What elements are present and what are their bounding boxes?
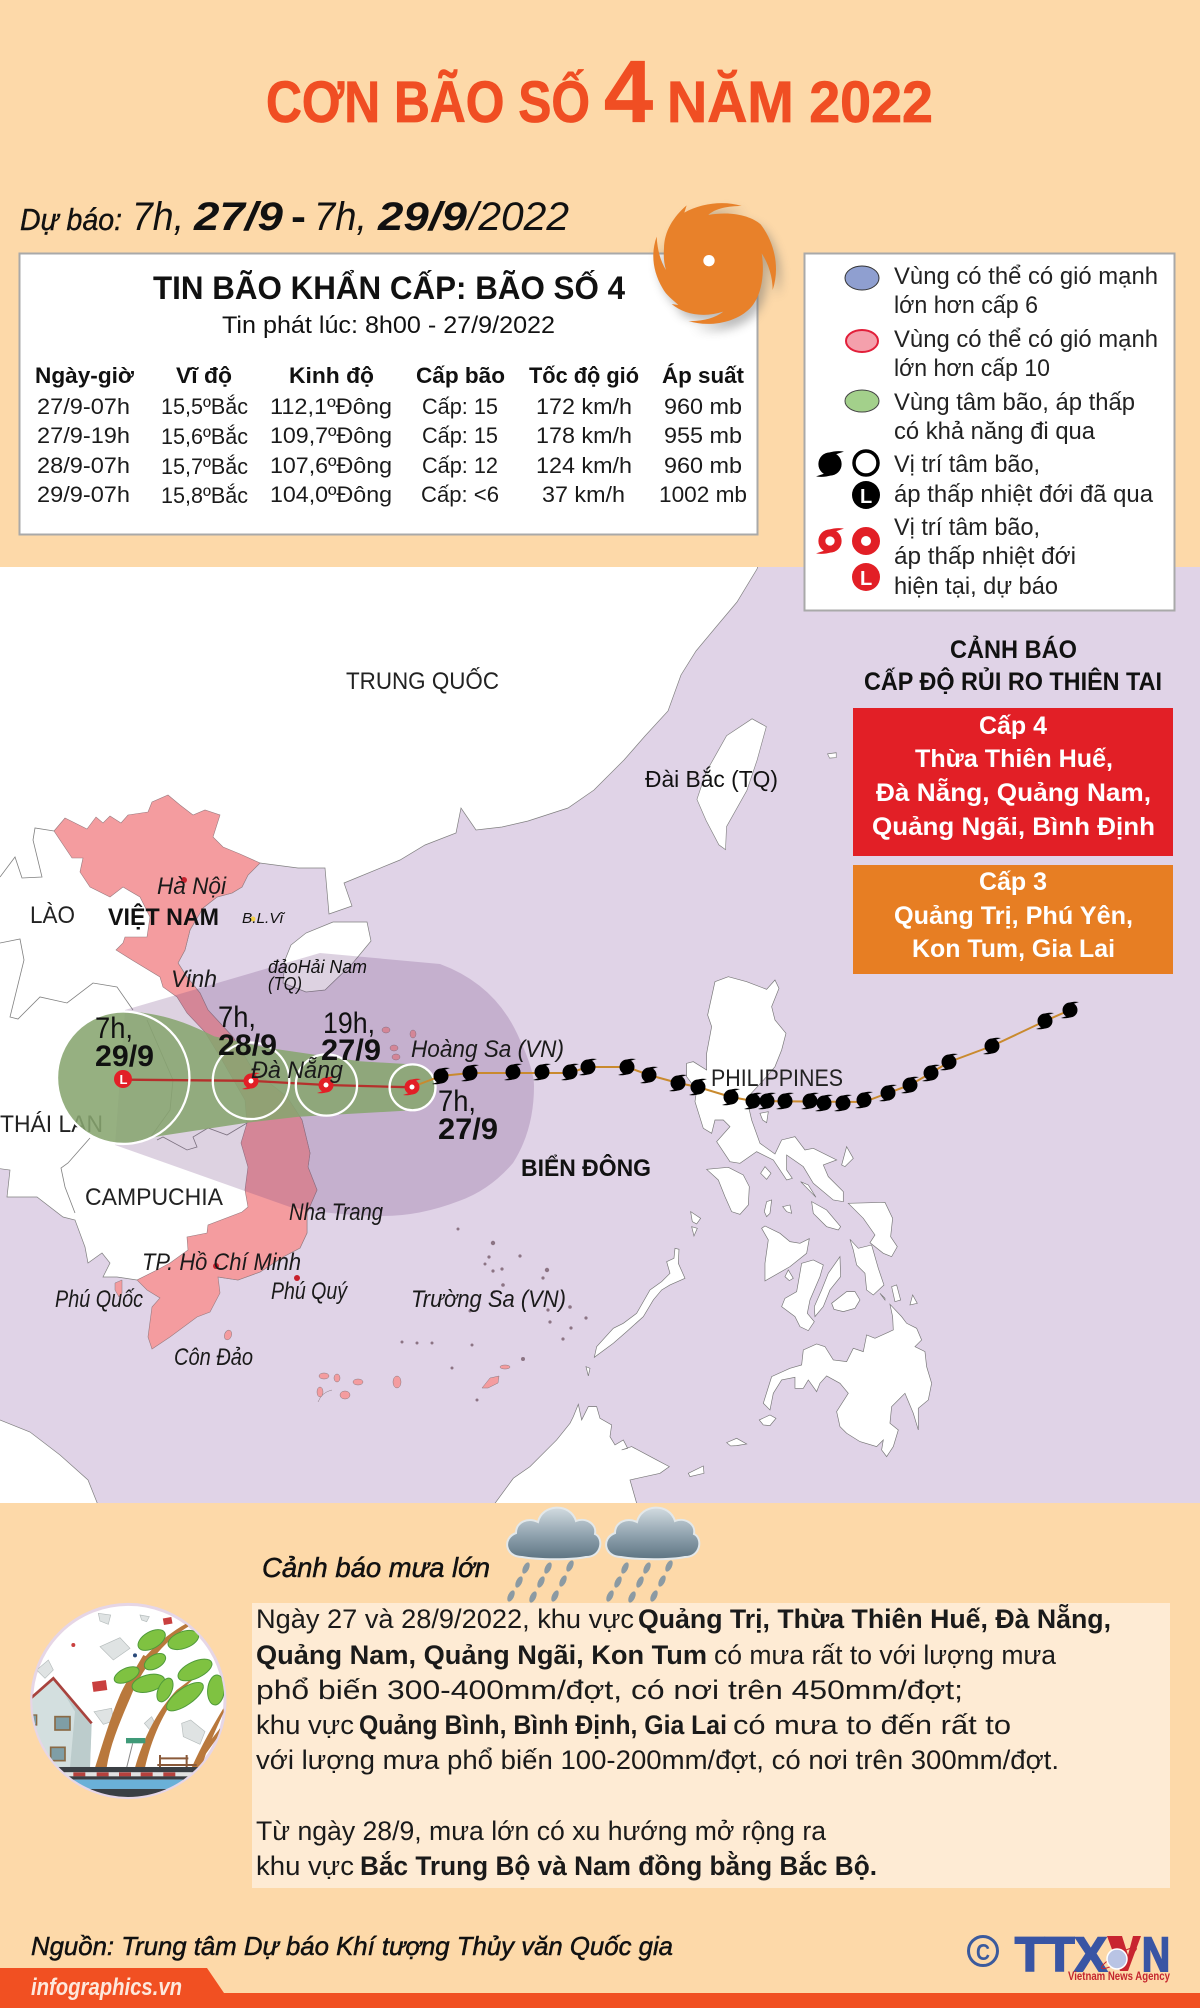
legend: wind above level 6: lớn hơn cấp 6 bbox=[894, 292, 1038, 319]
table row 29/9-07h: 104,0ºĐông bbox=[270, 482, 392, 507]
table row 27/9-07h: 15,5ºBắc bbox=[161, 394, 248, 419]
table row 28/9-07h: 15,7ºBắc bbox=[161, 454, 248, 479]
map labels: Đài Bắc (TQ) bbox=[645, 766, 778, 792]
panel: storm bulletin table bbox=[20, 254, 758, 534]
table header row: Cấp bão bbox=[416, 363, 505, 388]
foliage bbox=[114, 1629, 224, 1712]
risk warning heading: CẤP ĐỘ RỦI RO THIÊN TAI bbox=[864, 666, 1162, 696]
circle 28/9 bbox=[213, 1043, 289, 1119]
land: mainland Asia bbox=[0, 560, 760, 1280]
forecast period line: Dự báo: bbox=[20, 202, 122, 237]
line 4: khu vực bbox=[256, 1710, 354, 1740]
map labels: Hà Nội bbox=[157, 873, 227, 900]
table row 27/9-07h: 172 km/h bbox=[536, 394, 632, 419]
logo: TTXVN: Vietnam News Agency bbox=[1068, 1969, 1170, 1983]
risk warning heading: CẢNH BÁO bbox=[950, 634, 1077, 664]
panel: risk level 4: Quảng Ngãi, Bình Định bbox=[872, 813, 1155, 841]
map labels: CAMPUCHIA bbox=[85, 1184, 223, 1211]
forecast zone: storm centre path bbox=[57, 1012, 436, 1144]
panel: risk level 4: Thừa Thiên Huế, bbox=[915, 745, 1113, 773]
map labels: TP. Hồ Chí Minh bbox=[142, 1249, 301, 1276]
panel: risk level 3: Cấp 3 bbox=[979, 868, 1047, 896]
table header row: Kinh độ bbox=[289, 363, 374, 388]
table row 27/9-19h: 15,6ºBắc bbox=[161, 424, 248, 449]
table row 28/9-07h: 960 mb bbox=[664, 453, 742, 478]
table row 27/9-19h: 109,7ºĐông bbox=[270, 423, 392, 448]
copyright mark: C bbox=[976, 1939, 990, 1965]
road sign and fence bbox=[126, 1738, 197, 1768]
panel: risk level 3 bbox=[853, 865, 1173, 974]
legend: wind above level 6: Vùng có thể có gió mạnh bbox=[894, 263, 1158, 290]
table row 27/9-19h: 955 mb bbox=[664, 423, 742, 448]
risk warning heading bbox=[864, 634, 1162, 696]
map labels: LÀO bbox=[30, 902, 75, 929]
land: Hainan island bbox=[283, 922, 371, 992]
map labels: 19h, bbox=[323, 1007, 375, 1040]
forecast marker 7h 27/9 bbox=[403, 1079, 421, 1095]
table row 28/9-07h: 124 km/h bbox=[536, 453, 632, 478]
table header row: Tốc độ gió bbox=[529, 363, 639, 388]
map labels: 7h, bbox=[438, 1085, 476, 1118]
map labels: đảoHải Nam bbox=[268, 957, 367, 977]
footer website: infographics.vn bbox=[31, 1974, 182, 2001]
map labels: Nha Trang bbox=[289, 1199, 384, 1226]
title bbox=[266, 42, 933, 141]
map labels: 27/9 bbox=[321, 1034, 381, 1067]
table row 29/9-07h: 37 km/h bbox=[542, 482, 625, 507]
map labels: TRUNG QUỐC bbox=[346, 667, 499, 695]
small islands bbox=[115, 1027, 510, 1402]
storm past track line bbox=[412, 1010, 1070, 1102]
line 1 bbox=[256, 1602, 1111, 1634]
map labels: Trường Sa (VN) bbox=[411, 1286, 566, 1313]
legend: storm centre zone: Vùng tâm bão, áp thấp bbox=[894, 389, 1135, 416]
legend: past position: L bbox=[860, 486, 872, 508]
forecast period line: 29/9 bbox=[377, 195, 468, 239]
legend: current and forecast position: áp thấp nhiệt đới bbox=[894, 543, 1076, 570]
table header row: Vĩ độ bbox=[176, 363, 232, 388]
table row 29/9-07h: 1002 mb bbox=[659, 482, 747, 507]
icon: rain clouds bbox=[506, 1508, 699, 1604]
line 4 bbox=[256, 1710, 1011, 1740]
road and water bbox=[58, 1767, 198, 1797]
title: CƠN BÃO SỐ bbox=[266, 70, 590, 135]
forecast period line bbox=[20, 195, 569, 239]
table header row: Ngày-giờ bbox=[35, 363, 134, 388]
map labels: PHILIPPINES bbox=[711, 1065, 843, 1092]
storm past position markers bbox=[432, 1002, 1079, 1111]
line 3: phổ biến 300-400mm/đợt, có nơi trên 450mm/đợt; bbox=[256, 1675, 963, 1705]
logo: TTXVN bbox=[1015, 1929, 1170, 1983]
land: Vietnam bbox=[54, 795, 317, 1349]
legend: wind above level 6 bbox=[845, 263, 1158, 319]
legend: current and forecast position: L bbox=[860, 568, 872, 590]
legend: current and forecast position: hiện tại, dự báo bbox=[894, 573, 1058, 600]
map labels: Hoàng Sa (VN) bbox=[411, 1036, 564, 1063]
legend: current and forecast position bbox=[816, 514, 1076, 600]
map labels: Đà Nẵng bbox=[251, 1056, 344, 1084]
table row 29/9-07h: 29/9-07h bbox=[37, 482, 130, 507]
heavy rain heading: Cảnh báo mưa lớn bbox=[262, 1552, 490, 1583]
line 1: Ngày 27 và 28/9/2022, khu vực bbox=[256, 1604, 634, 1634]
panel: map bbox=[0, 560, 1200, 1510]
table row 27/9-19h: Cấp: 15 bbox=[422, 423, 498, 448]
line 5: với lượng mưa phổ biến 100-200mm/đợt, có nơi trên 300mm/đợt. bbox=[256, 1745, 1059, 1775]
table row 27/9-19h: 178 km/h bbox=[536, 423, 632, 448]
flying debris bbox=[37, 1613, 205, 1744]
table row 27/9-07h: 112,1ºĐông bbox=[270, 394, 392, 419]
small blue debris bbox=[133, 1653, 137, 1657]
trees bbox=[95, 1623, 224, 1768]
forecast marker 19h 27/9 bbox=[317, 1077, 335, 1093]
table row 27/9-19h: 27/9-19h bbox=[37, 423, 130, 448]
icon: orange typhoon bbox=[653, 203, 781, 331]
map labels: Vinh bbox=[171, 966, 217, 993]
legend: wind above level 10: Vùng có thể có gió mạnh bbox=[894, 326, 1158, 353]
forecast period line: - bbox=[291, 195, 306, 239]
land: Malay peninsula edge bbox=[0, 1420, 98, 1503]
bulletin issue time: Tin phát lúc: 8h00 - 27/9/2022 bbox=[222, 312, 555, 339]
source line: Nguồn: Trung tâm Dự báo Khí tượng Thủy văn Quốc gia bbox=[31, 1931, 673, 1961]
circle 7h 27/9 bbox=[390, 1064, 436, 1110]
line 2: Quảng Nam, Quảng Ngãi, Kon Tum bbox=[256, 1640, 707, 1670]
legend: storm centre zone bbox=[845, 389, 1135, 445]
line 4: Quảng Bình, Bình Định, Gia Lai bbox=[359, 1710, 727, 1740]
map labels: 27/9 bbox=[438, 1113, 498, 1146]
forecast period line: 7h, bbox=[132, 195, 184, 239]
legend: wind above level 10: lớn hơn cấp 10 bbox=[894, 355, 1050, 382]
table row 28/9-07h: 107,6ºĐông bbox=[270, 453, 392, 478]
table row 28/9-07h: Cấp: 12 bbox=[422, 453, 498, 478]
map labels: 29/9 bbox=[95, 1040, 154, 1073]
panel: risk level 4: Cấp 4 bbox=[979, 712, 1047, 740]
table row 27/9-07h bbox=[37, 394, 742, 419]
illustration: storm damage circle bbox=[30, 1604, 230, 1799]
map labels: Côn Đảo bbox=[174, 1344, 253, 1371]
table header row: Áp suất bbox=[662, 363, 745, 388]
centre track bbox=[123, 1080, 413, 1087]
table header row bbox=[35, 363, 745, 388]
city dots bbox=[181, 877, 300, 1281]
panel: heavy rain text bbox=[252, 1602, 1170, 1888]
map labels: B.L.Vĩ bbox=[242, 910, 286, 927]
table row 29/9-07h bbox=[37, 482, 747, 508]
map labels bbox=[30, 667, 843, 1371]
line 4: có mưa to đến rất to bbox=[733, 1710, 1011, 1740]
panel: risk level 4 bbox=[853, 708, 1173, 856]
map labels: Phú Quốc bbox=[55, 1286, 143, 1313]
legend: past position bbox=[816, 451, 1154, 509]
line 1: Quảng Trị, Thừa Thiên Huế, Đà Nẵng, bbox=[638, 1602, 1111, 1634]
panel: risk level 3: Quảng Trị, Phú Yên, bbox=[894, 902, 1133, 930]
legend: past position: áp thấp nhiệt đới đã qua bbox=[894, 481, 1154, 508]
forecast period line: 27/9 bbox=[193, 195, 284, 239]
table row 28/9-07h: 28/9-07h bbox=[37, 453, 130, 478]
forecast marker low pressure 29/9 bbox=[114, 1070, 132, 1088]
table row 27/9-19h bbox=[37, 423, 742, 449]
map labels: VIỆT NAM bbox=[108, 903, 219, 931]
circle 19h 27/9 bbox=[296, 1054, 357, 1116]
map labels: 7h, bbox=[95, 1012, 133, 1045]
map labels: (TQ) bbox=[268, 974, 302, 994]
legend: storm centre zone: có khả năng đi qua bbox=[894, 418, 1096, 445]
map labels: Phú Quý bbox=[271, 1278, 349, 1305]
line 2 bbox=[256, 1640, 1057, 1670]
forecast period line: 7h, bbox=[314, 195, 367, 239]
land: Philippines and Borneo bbox=[495, 977, 932, 1503]
circle 29/9 bbox=[57, 1012, 189, 1144]
table row 29/9-07h: Cấp: <6 bbox=[421, 482, 499, 507]
panel: risk level 3: Kon Tum, Gia Lai bbox=[912, 935, 1115, 963]
panel: risk level 4: Đà Nẵng, Quảng Nam, bbox=[876, 777, 1151, 807]
footer bar bbox=[0, 1968, 1200, 2008]
Truong Sa small dots bbox=[400, 1228, 588, 1402]
panel: legend bbox=[804, 254, 1174, 610]
line 7: Bắc Trung Bộ và Nam đồng bằng Bắc Bộ. bbox=[360, 1850, 877, 1881]
bulletin heading: TIN BÃO KHẨN CẤP: BÃO SỐ 4 bbox=[153, 270, 625, 306]
line 6: Từ ngày 28/9, mưa lớn có xu hướng mở rộng ra bbox=[256, 1816, 827, 1846]
table row 29/9-07h: 15,8ºBắc bbox=[161, 483, 248, 508]
line 2: có mưa rất to với lượng mưa bbox=[714, 1640, 1057, 1670]
table row 27/9-07h: 27/9-07h bbox=[37, 394, 130, 419]
title: NĂM 2022 bbox=[667, 70, 933, 135]
map labels: 7h, bbox=[218, 1001, 256, 1034]
borders of neighbouring countries bbox=[0, 828, 247, 1213]
roof tiles bbox=[71, 1617, 172, 1692]
legend: wind above level 10 bbox=[846, 326, 1158, 382]
forecast period line: /2022 bbox=[464, 195, 569, 239]
line 7: khu vực bbox=[256, 1851, 354, 1881]
legend: past position: Vị trí tâm bão, bbox=[894, 451, 1040, 478]
map labels: BIỂN ĐÔNG bbox=[521, 1154, 651, 1182]
land: Taiwan bbox=[697, 719, 836, 850]
forecast marker 28/9 bbox=[242, 1073, 260, 1089]
table row 28/9-07h bbox=[37, 453, 742, 479]
map labels: 28/9 bbox=[218, 1029, 277, 1062]
table row 27/9-07h: Cấp: 15 bbox=[422, 394, 498, 419]
legend: current and forecast position: Vị trí tâm bão, bbox=[894, 514, 1040, 541]
logo: TTXVN: N bbox=[1142, 1929, 1170, 1982]
label: Thailand: THÁI LAN bbox=[0, 1111, 103, 1138]
logo: TTXVN: TTX bbox=[1015, 1929, 1107, 1982]
house bbox=[30, 1678, 92, 1768]
copyright mark bbox=[968, 1936, 998, 1966]
forecast marker low pressure 29/9: L bbox=[120, 1072, 128, 1087]
title: 4 bbox=[604, 42, 653, 141]
forecast zone: strong wind cone bbox=[115, 953, 534, 1216]
table row 27/9-07h: 960 mb bbox=[664, 394, 742, 419]
